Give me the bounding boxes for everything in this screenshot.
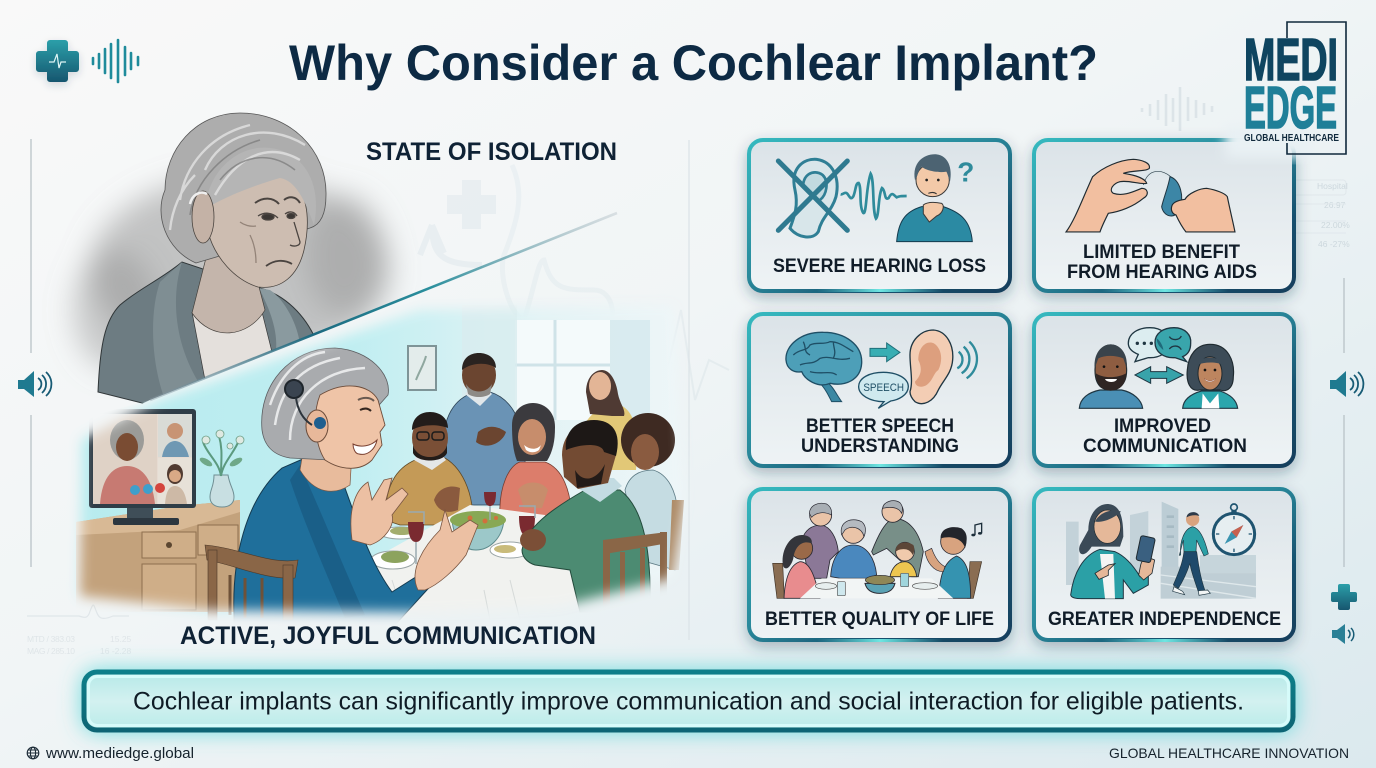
label: active joyful communication: ACTIVE, JOYFUL COMMUNICATION — [180, 622, 596, 650]
back hair — [262, 348, 388, 460]
cardigan — [98, 262, 316, 405]
watermark: faint data table: 22.00% — [1321, 220, 1350, 230]
dining table — [372, 492, 576, 616]
front hair sweep — [211, 171, 306, 206]
facial features — [240, 197, 300, 266]
icon: brain, speech bubble and ear — [786, 330, 977, 408]
man with glasses — [385, 412, 473, 525]
callout bar — [84, 672, 1293, 730]
card label: FROM HEARING AIDS — [1067, 262, 1257, 283]
video call monitor — [89, 409, 196, 525]
right wooden chair — [603, 532, 667, 602]
side lines — [31, 139, 1344, 640]
standing man — [442, 353, 525, 505]
watermark: faint data table — [1250, 180, 1350, 249]
ear with hearing aid — [190, 191, 214, 243]
icon: small speaker — [1332, 624, 1354, 644]
logo: MediEdge: GLOBAL HEALTHCARE — [1244, 133, 1339, 144]
diagonal divider — [150, 213, 617, 400]
left wooden chair — [205, 545, 298, 620]
standing yellow woman — [582, 370, 637, 470]
shirt — [192, 312, 272, 380]
watermark: faint chart stats: MTD / 383.03 — [27, 634, 75, 644]
icon: two people conversing — [1079, 328, 1238, 408]
icon: waveform — [93, 40, 138, 82]
wall picture — [408, 346, 436, 390]
icon: small cross — [1331, 584, 1357, 610]
icon: crossed ear, wave and confused man — [778, 154, 974, 242]
card label — [1083, 416, 1247, 457]
callout bar: Cochlear implants can significantly improve communication and social interaction for eligible patients. — [133, 688, 1244, 716]
top left brand icons — [36, 40, 138, 82]
green sweater man — [520, 420, 650, 612]
icon: hands holding hearing aid — [1066, 159, 1235, 232]
hands — [351, 478, 478, 590]
watermark: background health motifs — [420, 87, 1212, 400]
card label — [1067, 242, 1257, 283]
flower vase — [198, 430, 244, 507]
card: improved communication — [1034, 314, 1294, 467]
card: better quality of life — [749, 489, 1010, 642]
joyful woman sweater — [234, 458, 436, 625]
watermark: faint chart stats: 15.25 — [110, 634, 132, 644]
icon: brain, speech bubble and ear: SPEECH — [863, 382, 904, 394]
card: limited benefit from hearing aids — [1034, 126, 1315, 292]
label: state of isolation: STATE OF ISOLATION — [366, 138, 617, 166]
face — [208, 172, 307, 287]
window — [517, 320, 650, 420]
neck — [300, 458, 352, 492]
card label: SEVERE HEARING LOSS — [773, 256, 986, 277]
smiling face — [315, 386, 385, 468]
afro woman — [621, 413, 678, 570]
watermark: faint chart stats — [27, 605, 132, 656]
icon: medical cross — [36, 40, 79, 82]
illustration: joyful dinner scene — [74, 305, 684, 622]
fade patch near logo — [1225, 126, 1315, 158]
card label: BETTER SPEECH — [806, 416, 954, 437]
card: greater independence — [1034, 489, 1294, 642]
hearing implant — [285, 380, 328, 442]
card label: UNDERSTANDING — [801, 436, 959, 457]
card label: COMMUNICATION — [1083, 436, 1247, 457]
illustration: isolated woman — [73, 113, 390, 405]
far right chair — [669, 500, 684, 570]
grey smoke — [73, 175, 390, 370]
icon: crossed ear, wave and confused man: ? — [957, 157, 974, 188]
footer: website: www.mediedge.global — [45, 746, 194, 762]
card: severe hearing loss — [749, 140, 1010, 292]
card: better speech understanding — [749, 314, 1010, 467]
watermark: faint data table: 46 -27% — [1318, 239, 1350, 249]
watermark: faint chart stats: 16 -2.28 — [100, 646, 131, 656]
icon: speaker right — [1330, 371, 1363, 397]
watermark: faint chart stats: MAG / 285.10 — [27, 646, 75, 656]
title: Why Consider a Cochlear Implant? — [289, 35, 1098, 91]
card label: BETTER QUALITY OF LIFE — [765, 609, 994, 630]
card label — [801, 416, 959, 457]
card label: GREATER INDEPENDENCE — [1048, 609, 1281, 630]
icon: speaker left — [18, 371, 51, 397]
card label: IMPROVED — [1114, 416, 1211, 437]
neck — [192, 250, 265, 333]
watermark: faint data table: 26:97 — [1324, 200, 1346, 210]
coral woman — [500, 403, 572, 525]
footer: tagline: GLOBAL HEALTHCARE INNOVATION — [1109, 745, 1349, 761]
icon: family at table — [773, 501, 982, 598]
icon: woman with phone, walking man, compass — [1066, 502, 1256, 599]
card label: LIMITED BENEFIT — [1083, 242, 1240, 263]
sideboard — [76, 500, 240, 612]
logo: MediEdge — [1244, 22, 1346, 154]
watermark: faint data table: Hospital — [1317, 181, 1348, 191]
back hair — [161, 113, 326, 263]
